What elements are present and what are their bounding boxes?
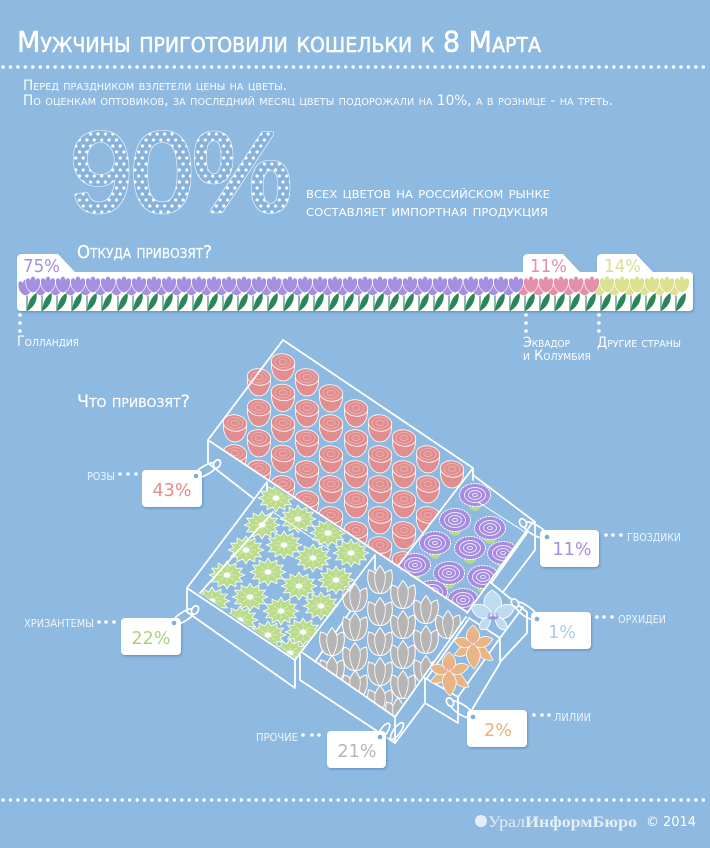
bar background with tabs — [17, 254, 693, 311]
carnations — [400, 484, 518, 616]
callout: orchids 1% — [510, 597, 666, 649]
lilies — [430, 625, 493, 696]
footer credit: © 2014 — [646, 815, 696, 830]
label: ЛИЛИИ — [554, 712, 591, 724]
tag — [327, 731, 386, 768]
panel: origin bar — [17, 254, 693, 311]
tag — [467, 710, 527, 747]
title: Мужчины приготовили кошельки к 8 Марта — [17, 26, 541, 59]
90% caption — [306, 183, 550, 220]
intro text — [23, 78, 613, 109]
90% caption: составляет импортная продукция — [306, 201, 548, 220]
label: ГВОЗДИКИ — [627, 532, 681, 544]
origin label: other countries — [597, 313, 681, 351]
callout: chrysanthemums 22%: 22% — [132, 629, 170, 649]
other flowers: grey tulips — [320, 566, 460, 726]
heading: what: Что привозят? — [77, 392, 190, 412]
tag — [142, 470, 202, 507]
label: 11%: 11% — [530, 256, 567, 277]
callout: carnations 11%: 11% — [553, 540, 591, 560]
callout: carnations 11% — [518, 518, 681, 567]
origin label: other countries: Другие страны — [597, 335, 681, 351]
callout: orchids 1%: 1% — [548, 623, 576, 643]
intro text: Перед праздником взлетели цены на цветы. — [23, 78, 287, 94]
chrysanthemums — [194, 484, 369, 667]
origin label: Ecuador and Colombia — [523, 313, 591, 364]
label: ХРИЗАНТЕМЫ — [24, 618, 94, 630]
footer credit — [475, 814, 696, 831]
callout: roses 43%: 43% — [153, 481, 191, 501]
heading: where from: Откуда привозят? — [77, 242, 212, 263]
callout: other 21%: 21% — [338, 742, 376, 762]
chart: flower crate — [187, 340, 535, 743]
label: ПРОЧИЕ — [256, 732, 298, 744]
origin label: Ecuador and Colombia: Эквадор — [523, 335, 570, 351]
origin label: Holland: Голландия — [17, 334, 79, 350]
label: РОЗЫ — [87, 471, 115, 483]
roses — [222, 352, 465, 579]
tag — [540, 530, 599, 567]
label: 14%: 14% — [604, 256, 641, 277]
90% caption: всех цветов на российском рынке — [306, 183, 550, 202]
big number 90%: 90% — [70, 110, 292, 235]
label: 75%: 75% — [23, 256, 60, 277]
label: ОРХИДЕИ — [618, 614, 666, 626]
callout: lilies 2%: 2% — [484, 721, 512, 741]
crate lines — [187, 340, 535, 743]
tulips row — [18, 276, 689, 311]
intro text: По оценкам оптовиков, за последний месяц цветы подорожали на 10%, а в рознице - на треть. — [23, 93, 613, 109]
origin label: Holland — [17, 313, 79, 350]
orchid — [471, 590, 515, 630]
tag — [531, 612, 591, 649]
callout: chrysanthemums 22% — [24, 605, 200, 655]
footer credit: УралИнформБюро — [488, 814, 637, 831]
callout: other 21% — [256, 721, 406, 768]
origin label: Ecuador and Colombia: и Колумбия — [523, 348, 591, 364]
callout: lilies 2% — [445, 696, 591, 747]
tag — [121, 618, 181, 655]
callout: roses 43% — [87, 459, 222, 507]
